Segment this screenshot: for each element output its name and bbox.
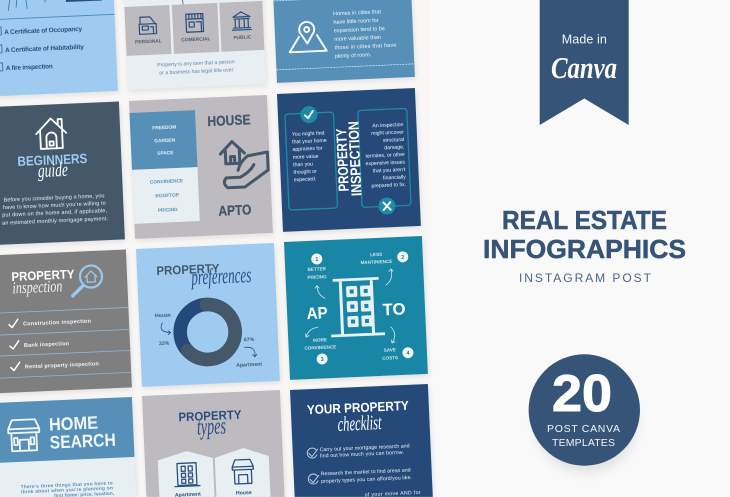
description: Property is any item that a person [157, 59, 235, 69]
frame: pros: that your home [292, 138, 327, 145]
icon: house [36, 118, 67, 149]
benefit 4 [381, 326, 414, 361]
checklist items [0, 23, 85, 73]
vertical title: INSPECTION [346, 121, 366, 196]
panel: property kinds [122, 0, 266, 90]
frame: cons: termites, or other [365, 152, 405, 160]
tile: house [214, 447, 271, 497]
list: apartment benefits: ROOFTOP [155, 192, 180, 199]
body text: put down on the home and, if applicable, [2, 208, 108, 219]
script subheading: types [196, 414, 226, 441]
benefit 1 [306, 253, 328, 299]
item: rental: Rental property inspection [25, 361, 100, 370]
header band [0, 397, 134, 463]
label: house share [155, 313, 172, 347]
benefit 3: CONVINIENCE [304, 344, 336, 351]
benefit 4: COSTS [382, 355, 398, 361]
script descender [181, 0, 183, 6]
label: apartment share: 67% [244, 337, 255, 343]
icon: check badge [300, 106, 318, 123]
item: construction: Construction inspection [23, 319, 92, 328]
body text [333, 9, 397, 60]
panel: property inspection list [0, 249, 132, 393]
panel: property inspection pros and cons [277, 88, 421, 232]
panel: beginners guide [0, 101, 125, 245]
panel: city homes [271, 0, 415, 83]
list: apartment benefits: CONVINIENCE [150, 178, 184, 186]
ribbon: made in canva [540, 0, 629, 125]
heading: SEARCH [49, 430, 116, 453]
script subheading: guide [37, 158, 68, 182]
tile: public: PUBLIC [233, 34, 252, 41]
list: apartment benefits [132, 167, 200, 224]
frame: cons: structural [383, 137, 404, 144]
label: house: HOUSE [207, 111, 251, 129]
checklist items: A Certificate of Occupancy [4, 26, 83, 36]
item: research: find out how much you can borrow. [320, 450, 404, 459]
ribbon: made in canva: Made in [562, 32, 607, 46]
benefit 2: 2 [401, 255, 404, 261]
script subheading: preferences [189, 263, 252, 291]
icon: house front [8, 419, 40, 451]
benefit 3 [304, 326, 337, 365]
cropped script heading strokes [8, 0, 46, 11]
frame: pros: You might find [292, 130, 325, 138]
benefit 1: PRICING [307, 274, 327, 280]
list: house benefits: FREEDOM [152, 124, 176, 132]
script subheading: checklist [337, 411, 383, 436]
body text: an estimated monthly mortgage payment. [2, 216, 109, 227]
heading [49, 412, 116, 453]
icon: magnifier [72, 265, 103, 296]
title: INFOGRAPHICS [483, 234, 686, 264]
ribbon: made in canva: Canva [551, 50, 617, 85]
script subheading: inspection [12, 277, 63, 298]
item: bank: Bank inspection [24, 341, 70, 349]
frame: cons: prepared to fix. [371, 182, 406, 189]
subtitle: INSTAGRAM POST [519, 271, 652, 285]
icon: apartment building [329, 278, 385, 336]
body text: Homes in cities that [333, 9, 382, 17]
benefit 2: MANTINIENCE [360, 259, 393, 265]
panel: home search [0, 397, 136, 497]
panel: property preferences [136, 243, 280, 387]
tile: comercial: COMERCIAL [181, 36, 211, 43]
frame: pros [285, 112, 338, 210]
checklist items: A Certificate of Habitability [5, 44, 84, 54]
badge: 20 post canva templates: 20 [552, 365, 612, 423]
body text: expansion tend to be [334, 26, 385, 34]
icon: house in hand [220, 140, 269, 188]
frame: cons: might uncover [371, 129, 404, 137]
frame: pros: than you [293, 161, 313, 168]
benefit 2 [360, 251, 409, 286]
item: research: Carry out your mortgage research and [320, 443, 410, 453]
panel: property types [142, 390, 285, 497]
title: REAL ESTATE [502, 205, 667, 235]
body text: think about when you're planning on [21, 485, 113, 495]
label: house share: House [155, 313, 171, 319]
body text: more valuable than [334, 35, 381, 43]
label: apartment share: Apartment [236, 362, 263, 369]
frame: cons: that you aren't [373, 167, 406, 174]
panel: certificates checklist [0, 0, 118, 97]
label: to: TO [382, 300, 406, 319]
body text: plenty of room. [335, 52, 372, 60]
item: rental [11, 359, 100, 371]
body text [21, 480, 115, 497]
heading: BEGINNERS [17, 151, 88, 169]
panel: property checklist [290, 384, 433, 497]
description: or a business has legal title over [159, 67, 234, 76]
frame: pros: more value [293, 154, 319, 161]
item: bank [10, 339, 70, 350]
title [483, 205, 686, 264]
item: research [307, 443, 410, 460]
benefit 2: LESS [370, 252, 382, 257]
body text [1, 193, 109, 227]
frame: cons: An inspection [372, 122, 404, 129]
list: house benefits [130, 110, 197, 170]
list: apartment benefits: PRICING [158, 207, 178, 214]
icon: x badge [378, 197, 396, 215]
label: house share: 33% [159, 341, 170, 347]
item: market: property types you can afford/you like. [321, 475, 412, 485]
vertical title [334, 121, 366, 197]
heading: PROPERTY [178, 408, 242, 424]
tile: personal: PERSONAL [135, 38, 162, 46]
frame: cons [358, 108, 411, 207]
item: market [308, 467, 412, 485]
label: apartment share [235, 337, 263, 369]
benefit 3: 3 [321, 357, 324, 363]
badge: 20 post canva templates [529, 354, 640, 466]
heading: PROPERTY [156, 261, 220, 278]
item: market: Research the market to find areas and [321, 468, 411, 477]
list: house benefits: GARDEN [154, 138, 176, 144]
frame: pros: expected. [294, 176, 316, 183]
frame: cons: expensive issues [365, 159, 406, 167]
benefit 1: BETTER [307, 266, 327, 272]
frame: cons: financially [383, 174, 406, 181]
panel: house vs apto [129, 95, 273, 239]
frame: pros: thought or [293, 169, 317, 176]
heading: PROPERTY [11, 267, 75, 284]
benefit 1: 1 [315, 257, 318, 263]
tile: public [219, 1, 264, 52]
checklist items: A fire inspection [6, 63, 53, 72]
divider line [0, 14, 115, 21]
badge: 20 post canva templates: POST CANVA [547, 423, 620, 435]
frame: cons: damage, [384, 144, 405, 151]
item: construction [9, 316, 92, 328]
benefit 4: SAVE [384, 347, 396, 353]
heading: HOME [49, 412, 98, 435]
donut chart [179, 303, 236, 361]
frame: pros: appraises for [292, 146, 323, 153]
body text: have little room for [333, 18, 379, 26]
heading: YOUR PROPERTY [307, 398, 409, 417]
cropped header block [65, 0, 102, 2]
body text: There's three things that you have to [21, 480, 113, 490]
benefit 3: MORE [313, 337, 327, 343]
body text: have to know how much you're willing to [3, 201, 106, 211]
list: house benefits: SPACE [157, 150, 174, 157]
tile: personal [124, 5, 171, 56]
panel: apto benefits [284, 236, 428, 380]
body text: those in cities that have [334, 43, 397, 51]
tile: apartment [157, 450, 214, 497]
tile: house: House [236, 490, 252, 497]
body text: Before you consider buying a home, you [3, 193, 105, 204]
label: ap: AP [306, 304, 328, 323]
label: apto: APTO [218, 201, 252, 219]
vertical title: PROPERTY [334, 128, 353, 192]
icon: map pin [288, 21, 327, 52]
description [157, 59, 235, 77]
tile: comercial [172, 3, 219, 54]
benefit 4: 4 [406, 351, 411, 357]
badge: 20 post canva templates: TEMPLATES [552, 437, 615, 449]
